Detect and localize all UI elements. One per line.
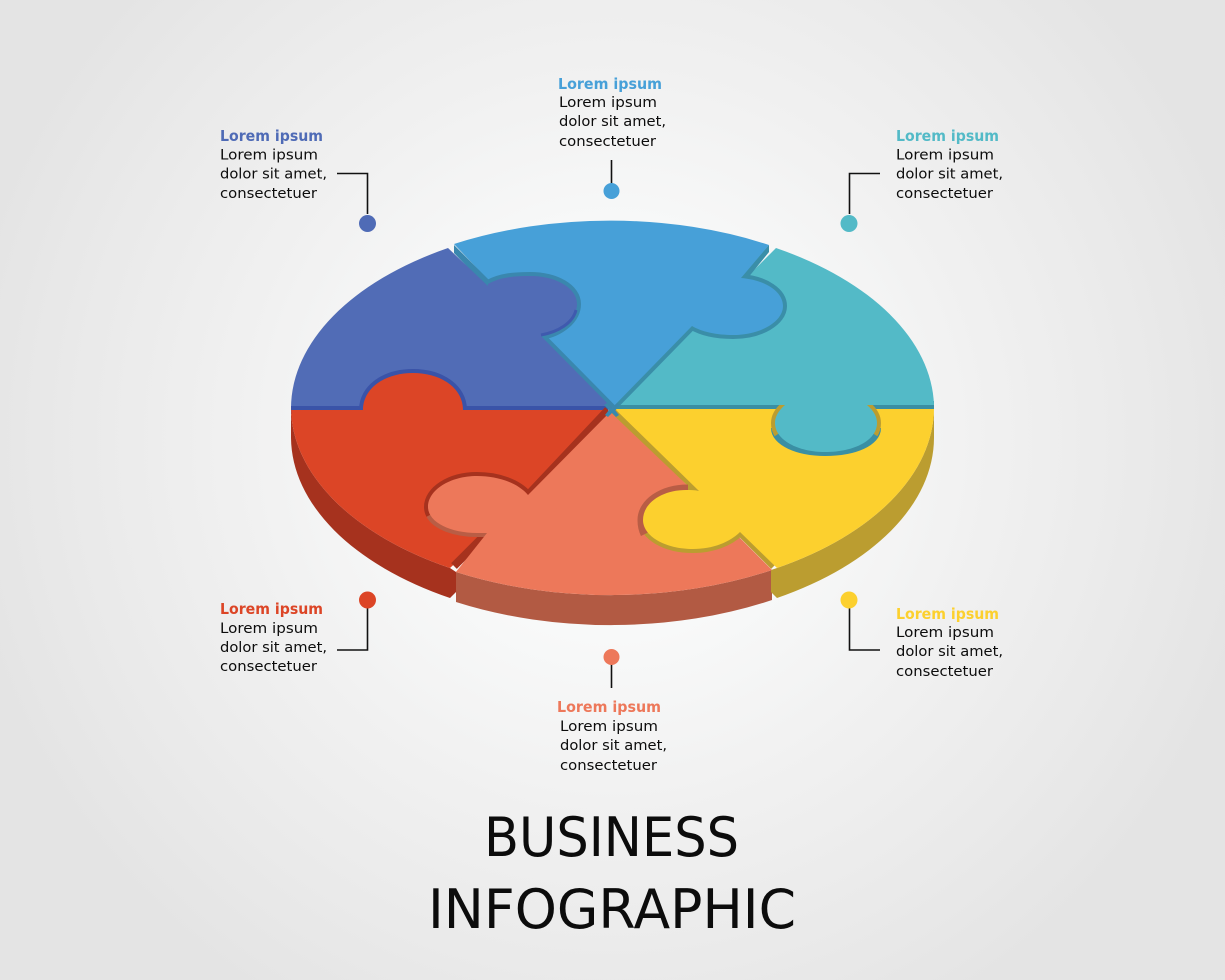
puzzle disc chart	[291, 221, 934, 625]
callout: bottom centre: Lorem ipsum	[560, 719, 658, 735]
puzzle piece: teal	[616, 248, 934, 452]
callout: top left: Lorem ipsum	[220, 127, 323, 145]
puzzle piece: blue	[454, 221, 783, 408]
callout: top centre: Lorem ipsum	[558, 75, 662, 93]
callout: top right: Lorem ipsum	[896, 148, 994, 164]
callout: top right: consectetuer	[896, 186, 993, 202]
callout: top centre: dolor sit amet,	[559, 114, 666, 130]
wall: red piece	[291, 408, 456, 598]
callout: top left	[220, 127, 376, 232]
callout: top centre: Lorem ipsum	[559, 95, 657, 111]
callout: bottom left: Lorem ipsum	[220, 621, 318, 637]
callout: bottom centre: consectetuer	[560, 758, 657, 774]
wall: yellow piece	[771, 408, 934, 598]
callout: bottom left: consectetuer	[220, 659, 317, 675]
callout: bottom centre: Lorem ipsum	[557, 698, 661, 716]
callout: top centre: consectetuer	[559, 134, 656, 150]
callout: bottom left: Lorem ipsum	[220, 600, 323, 618]
callout: top left: consectetuer	[220, 186, 317, 202]
callout: top right	[840, 127, 1003, 232]
callout: top right: dolor sit amet,	[896, 166, 1003, 182]
callout: top left: dolor sit amet,	[220, 166, 327, 182]
callout: top right: Lorem ipsum	[896, 127, 999, 145]
puzzle piece: indigo	[291, 248, 612, 408]
title: INFOGRAPHIC	[428, 878, 796, 941]
title	[428, 806, 796, 941]
wall: salmon piece	[456, 570, 772, 625]
puzzle piece: red	[291, 373, 608, 568]
callout: bottom left: dolor sit amet,	[220, 640, 327, 656]
puzzle piece: salmon tab	[428, 410, 612, 572]
callout: bottom right: Lorem ipsum	[896, 625, 994, 641]
callout: bottom right	[840, 592, 1003, 680]
puzzle piece: salmon	[456, 410, 772, 595]
callout: top centre	[558, 75, 666, 199]
puzzle piece: yellow	[614, 408, 934, 568]
callout: bottom left	[220, 592, 376, 675]
title: BUSINESS	[484, 806, 739, 869]
callout: bottom centre: dolor sit amet,	[560, 738, 667, 754]
callout: bottom right: consectetuer	[896, 664, 993, 680]
centre joint	[604, 403, 620, 417]
callout: top left: Lorem ipsum	[220, 148, 318, 164]
callout: bottom right: dolor sit amet,	[896, 644, 1003, 660]
callout: bottom centre	[557, 649, 667, 774]
callout: bottom right: Lorem ipsum	[896, 605, 999, 623]
